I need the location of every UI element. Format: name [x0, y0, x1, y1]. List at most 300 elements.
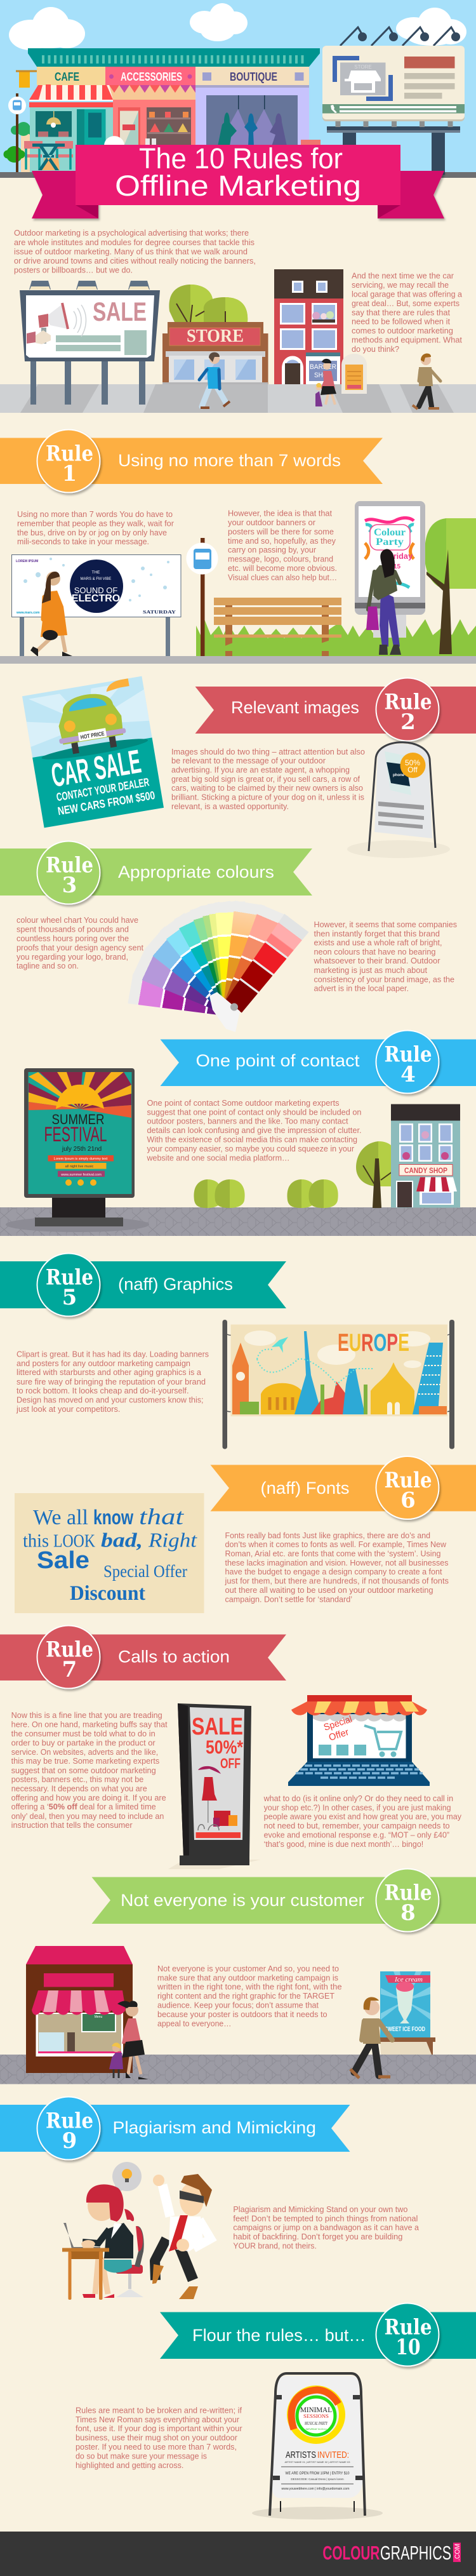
panel: rule 1 banner	[0, 429, 383, 493]
font samples box: that	[139, 1504, 184, 1529]
rule 3 text right: whatsoever to their brand. Outdoor	[313, 956, 440, 965]
rule 6 text: don’ts when it comes to fonts as well. For example, Times New	[225, 1540, 447, 1549]
intro text right: need to be followed when it	[352, 318, 450, 326]
rule 5 text: littered with starbursts and other aging graphics is a	[17, 1368, 201, 1377]
rule 7 text right: ‘that’s good, mine is due next month’… bingo!	[264, 1840, 423, 1849]
rule 4 text: With the existence of social media this can make contacting	[147, 1136, 357, 1144]
rule 7 text left: here. On one hand, marketing buffs say that	[11, 1720, 168, 1729]
rule 1 text right: However, the idea is that that	[228, 509, 332, 518]
footer	[0, 2532, 476, 2576]
ribbon	[160, 1039, 476, 1086]
figure: blindfolded man	[152, 2174, 212, 2299]
rule badge: Rule	[46, 1265, 93, 1291]
shop sign: accessories: ACCESSORIES	[121, 70, 182, 83]
panel: rule 2 banner	[195, 678, 476, 741]
title text	[115, 142, 361, 202]
rule 4 text: details can look confusing and give the impression of clutter.	[147, 1126, 362, 1135]
a-board poster rule 10: www.youwebhere.com | info@yourdomain.com	[282, 2487, 349, 2491]
rule 4 text: website and one social media platform…	[147, 1153, 289, 1162]
red house: SHOP	[314, 372, 332, 379]
rule 7 text left: only’ deal, then you may need to include an	[11, 1812, 164, 1821]
poster headline	[49, 742, 156, 817]
rule 6 text: Roman, Arial etc. are fonts that come with the ‘system’. Using	[225, 1550, 440, 1559]
figure: woman in orange	[30, 572, 72, 657]
rule 3 text left: spent thousands of pounds and	[17, 925, 129, 934]
rule badge: 5	[62, 1285, 77, 1310]
colour swatch fan	[128, 901, 308, 1032]
font samples box: bad,	[101, 1528, 143, 1551]
rule badge: 4	[400, 1062, 416, 1087]
rule badge	[376, 678, 439, 741]
rule 5 text: just look at your competitors.	[16, 1405, 121, 1414]
rule 10 text: business, use their mug shot on your outdoor	[76, 2434, 237, 2443]
sound of electro billboard: SATURDAY	[143, 610, 176, 615]
online shop laptop: Special	[322, 1714, 354, 1733]
figure: woman and child	[109, 2001, 149, 2079]
heading: Plagiarism and Mimicking	[113, 2118, 316, 2137]
rule 7 text left: offering a ‘50% off deal for a limited time	[11, 1802, 156, 1811]
car	[31, 677, 149, 763]
road	[0, 2055, 476, 2084]
rule 6 text: out there all waiting to be used on your outdoor marketing	[225, 1586, 433, 1595]
sound of electro billboard: SOUND OF	[74, 586, 117, 595]
billboard: STORE	[354, 64, 372, 70]
heading: Using no more than 7 words	[118, 451, 341, 470]
intro text right: say that there are rules that	[352, 308, 451, 317]
rule badge: Rule	[385, 1468, 432, 1493]
billboard	[322, 46, 465, 175]
poster headline: CAR SALE	[49, 743, 143, 795]
panel: rule 1 illustration	[0, 501, 476, 664]
rule 3 text right: neon colours that have no bearing	[314, 948, 435, 956]
font samples box: Discount	[70, 1582, 145, 1605]
heading: Not everyone is your customer	[121, 1891, 364, 1910]
red house: BARBER	[310, 363, 336, 371]
panel: rule 3 banner	[0, 841, 312, 904]
a-board poster rule 10: MINIMAL	[300, 2405, 332, 2414]
rule 1 text right: your outdoor banners or	[228, 518, 315, 527]
rule badge: Rule	[385, 1880, 432, 1905]
rule 9 text	[233, 2205, 419, 2251]
rule 6 text	[224, 1531, 449, 1604]
rule 10 text: do so but make sure your message is	[76, 2452, 207, 2460]
logo: colourgraphics	[322, 2542, 461, 2564]
ice cream poster: SWEET ICE FOOD	[385, 2026, 425, 2033]
intro text right	[352, 272, 462, 354]
rule 4 text	[147, 1099, 362, 1162]
title banner	[32, 142, 444, 218]
font samples box: Sale	[37, 1547, 89, 1574]
heading: Flour the rules… but…	[192, 2326, 366, 2345]
rule 3 text left: countless hours poring over the	[17, 934, 129, 943]
ribbon	[0, 1261, 286, 1308]
intro text right: great deal… But, some experts	[352, 299, 459, 308]
shop sign: cafe: CAFE	[55, 70, 79, 83]
online shop laptop: Offer	[327, 1727, 350, 1743]
intro text left: are whole institutes and modules for degree courses that tackle this	[14, 238, 255, 247]
road	[0, 1207, 476, 1236]
logo: colourgraphics: .COM	[454, 2544, 461, 2561]
rule badge	[376, 1868, 439, 1932]
rule badge: 8	[400, 1900, 416, 1926]
rule 1 text right: posters will be there for some	[228, 527, 334, 536]
rule 3 text right: exists and use a whole raft of bright,	[314, 939, 442, 948]
rule 1 text right: time and so, hopefully, as they	[228, 537, 336, 546]
rule 7 text left: order to buy or partake in the product or	[11, 1739, 155, 1748]
rule 9 text: habit of backfiring. Don’t forget you are building	[233, 2232, 402, 2241]
bus stop sign	[187, 538, 218, 657]
figure: walking man	[350, 1997, 392, 2078]
ribbon	[211, 1465, 476, 1512]
rule badge: 9	[62, 2128, 77, 2154]
bus stop sign	[8, 70, 37, 172]
rule 6 text: Fonts really bad fonts Just like graphics, there are do’s and	[225, 1531, 430, 1540]
rule 2 text: relevant, is a wasted opportunity.	[171, 802, 289, 811]
candy shop	[391, 1104, 460, 1208]
a-board poster rule 10: ARTISTS	[286, 2450, 316, 2460]
panel: rule 5 banner	[0, 1254, 286, 1316]
rule 7 text left: the consumer must be told what to do in	[11, 1729, 155, 1738]
store building: STORE	[187, 326, 244, 346]
paving	[0, 656, 476, 664]
rule 8 text: audience. Keep your focus; don’t assume that	[157, 2001, 319, 2009]
trees behind store	[169, 285, 248, 322]
rule 7 text left	[11, 1711, 168, 1830]
logo: colourgraphics: COLOUR	[322, 2542, 380, 2564]
rule 3 text right: consistency of your brand image, as the	[314, 976, 454, 984]
rule 6 text: have the budget to engage a design company to create a font	[225, 1567, 442, 1576]
rule 1 text right	[228, 509, 337, 582]
rule 3 text left: colour wheel chart You could have	[17, 916, 138, 925]
poster stand: Friday	[388, 551, 413, 561]
ribbon	[195, 687, 476, 734]
rule 7 text right: evoke and emotional response e.g. “MOT – only £40”	[264, 1830, 449, 1839]
poster bars	[48, 1155, 114, 1177]
sound of electro billboard: ELECTRO	[72, 593, 120, 604]
rule 7 text right: your shop etc.?) In other cases, if you are just making	[264, 1804, 451, 1813]
rule 3 text left: you regarding your logo, brand,	[17, 953, 128, 962]
figure: woman with child	[315, 359, 336, 406]
intro text right: local garage that was offering a	[352, 290, 462, 299]
rule 5 text: and posters for any outdoor marketing campaign	[17, 1359, 190, 1368]
rule 7 text right	[263, 1794, 462, 1849]
rule 7 text left: necessary. It depends on what you are	[11, 1785, 147, 1794]
digital sale totem: OFF	[220, 1755, 241, 1771]
rule 2 text	[171, 748, 365, 811]
poster text: www.summer festival.com	[60, 1173, 102, 1177]
rule 9 text: Plagiarism and Mimicking Stand on your own two	[233, 2205, 407, 2214]
title text: Offline Marketing	[115, 170, 361, 202]
illustration: woman at laptop and blindfolded man	[62, 2162, 212, 2300]
a-board sign rule 2: Off	[407, 765, 418, 774]
intro text right: methods and equipment. What	[352, 336, 462, 345]
rule badge	[37, 429, 100, 493]
rule badge	[37, 1626, 100, 1688]
rule badge: Rule	[46, 2109, 93, 2134]
rule 9 text: feet! Don’t be tempted to pinch things from national	[233, 2214, 418, 2223]
rule 10 text: highlighted and getting across.	[76, 2461, 183, 2470]
panel: intro street illustration	[0, 269, 476, 413]
rule 5 text: Design has moved on and your customers know this;	[17, 1396, 203, 1405]
a-board poster rule 10	[252, 2373, 383, 2519]
a-board poster rule 10: SESSIONS	[303, 2413, 329, 2419]
rule 8 text: make sure that any outdoor marketing campaign is	[157, 1974, 338, 1983]
a-board poster rule 10: ARTIST NAME 01 | ARTIST NAME 02 | ARTIST NAME 03	[284, 2460, 350, 2464]
font samples box: this	[23, 1531, 49, 1551]
car: HOT PRICE	[80, 730, 105, 741]
rule 4 text: suggest that one point of contact only should be included on	[147, 1108, 362, 1117]
rule badge	[37, 1254, 100, 1316]
rule badge: Rule	[385, 2314, 432, 2340]
rule 6 text: campaign. Don’t settle for ‘standard’	[225, 1595, 352, 1604]
poster stand: 15	[393, 563, 401, 570]
landmarks	[232, 1329, 447, 1414]
rule badge	[37, 841, 100, 904]
rule 8 text: appeal to everyone…	[157, 2020, 231, 2029]
a-board poster rule 10: DESSCODE: Casual Dress | Ipsum lorem	[291, 2478, 344, 2481]
shop: boutique	[195, 85, 309, 173]
digital sale totem: 50%*	[206, 1737, 243, 1758]
rule 2 text: great big sold sign is great or, if you sell cars, a row of	[171, 775, 360, 784]
poster headline: CONTACT YOUR DEALER	[55, 775, 150, 803]
poster text: FESTIVAL	[44, 1123, 107, 1146]
title text: The 10 Rules for	[139, 142, 343, 175]
heading: One point of contact	[195, 1051, 360, 1070]
heading: Relevant images	[231, 698, 359, 717]
rule 9 text: campaigns or jump on a bandwagon as it can have a	[233, 2223, 419, 2232]
ribbon	[0, 1635, 286, 1680]
font samples box: know	[93, 1506, 133, 1529]
font samples box: Right	[148, 1528, 197, 1551]
pavement	[0, 384, 476, 413]
rule 3 text right: marketing is just as much about	[314, 966, 428, 975]
panel: rule 4 banner	[160, 1030, 476, 1094]
rule badge	[376, 1030, 439, 1094]
rule 8 text: right content and the right graphic for the TARGET	[157, 1992, 334, 2001]
intro text left	[14, 229, 256, 274]
rule 7 text right: people aware you exist and how great you are, you may	[264, 1813, 462, 1821]
rule badge: 10	[396, 2335, 420, 2360]
ribbon	[0, 849, 312, 896]
rule 3 text left	[17, 916, 143, 970]
ribbon	[91, 1877, 476, 1924]
rule 10 text	[76, 2406, 242, 2470]
a-board poster rule 10: MUSICAL PARTY	[304, 2420, 328, 2426]
intro text right: do you think?	[352, 345, 399, 354]
digital sale totem: SALE	[192, 1714, 243, 1740]
cake shop: Menu	[95, 2015, 102, 2019]
poster text	[44, 1111, 108, 1177]
heading: Calls to action	[118, 1647, 230, 1667]
rule 3 text left: proofs that your design agency sent	[17, 944, 143, 953]
a-board sign rule 2: 50%	[405, 758, 420, 767]
rule 6 text: just for them, but there are hundreds, if not thousands of fonts	[224, 1576, 449, 1585]
panel: rule 6 banner	[211, 1456, 476, 1519]
rule 2 text: be relevant to the message of your outdoor	[171, 756, 326, 765]
figure: woman viewing poster	[366, 549, 401, 655]
figure: man in blue	[199, 352, 230, 408]
rule badge	[376, 2303, 439, 2366]
sale word: SALE	[93, 297, 147, 326]
heading: Appropriate colours	[118, 862, 274, 882]
rule 1 text left: mili-seconds to take in your message.	[17, 537, 149, 546]
panel: rule 8 banner	[91, 1868, 476, 1932]
rule 5 text: sure fire way of bringing the reputation of your brand	[17, 1378, 206, 1386]
rule 6 text: these lacks imagination and vision. However, not all businesses	[225, 1559, 448, 1567]
rule 1 text right: Visual clues can also help but…	[228, 573, 337, 582]
rule 3 text right: advert is in the local paper.	[314, 984, 409, 993]
rule 7 text right: what to do (is it online only? Or do they need to call in	[263, 1794, 453, 1803]
sound of electro billboard	[11, 555, 181, 656]
rule 2 text: advertising. If you are an estate agent, a whopping	[171, 766, 350, 775]
rule 4 text: One point of contact Some outdoor marketing experts	[147, 1099, 339, 1108]
shop: cafe	[24, 84, 113, 172]
cake shop	[26, 1946, 133, 2073]
rule badge	[37, 2097, 100, 2159]
rule badge: 2	[400, 709, 416, 735]
bench	[214, 598, 341, 656]
rule 3 text right	[313, 920, 457, 993]
car sale poster	[22, 676, 164, 828]
rule 8 text	[157, 1964, 342, 2029]
ribbon	[0, 2105, 350, 2152]
rule 1 text right: etc. will become more obvious.	[228, 564, 337, 573]
rule 8 text: Not everyone is your customer And so, you need to	[157, 1964, 339, 1973]
banner word: europe: EUROPE	[338, 1329, 409, 1357]
font samples box	[15, 1493, 204, 1613]
grass	[196, 619, 476, 656]
shop: accessories	[109, 85, 195, 172]
rule 7 text left: service. On websites, adverts and the like,	[11, 1748, 158, 1757]
a-board	[341, 354, 367, 394]
icon: megaphone	[27, 303, 86, 344]
a-board sign rule 2	[347, 742, 450, 858]
rule 7 text left: offering and how you are doing it. If you are	[11, 1794, 166, 1802]
idea bubble	[112, 2162, 142, 2194]
summer festival poster stand	[6, 1068, 149, 1232]
panel: rule 4 street illustration	[0, 1068, 476, 1236]
panel: header street scene	[0, 0, 476, 178]
rule badge: Rule	[385, 1042, 432, 1067]
rule 1 text right: message, logo, colours, brand	[228, 555, 333, 564]
poster text: SUMMER	[52, 1111, 104, 1127]
rule 1 text left	[17, 510, 174, 546]
rule 1 text right: carry on passing by, your	[228, 546, 316, 554]
rule 3 text left: tagline and so on.	[17, 962, 79, 970]
europe banner	[222, 1320, 454, 1449]
rule badge: 6	[400, 1487, 416, 1513]
sound of electro billboard: LOREM IPSUM	[16, 560, 38, 563]
figure: walking man	[413, 354, 440, 409]
intro text left: posters or billboards… but we do.	[14, 265, 133, 274]
ice cream poster: Ice cream	[394, 1976, 423, 1983]
rule badge: 3	[62, 873, 77, 898]
poster text: july 25th 21nd	[62, 1146, 102, 1153]
panel: rule 10 banner	[160, 2303, 476, 2366]
poster stand: Party	[376, 537, 404, 547]
poster sun	[56, 1085, 104, 1109]
tree	[356, 1141, 398, 1207]
rule 4 text: outdoor posters, banners and the like. Too many contact	[147, 1117, 348, 1125]
rule 10 text: font, use it. If your dog is important within your	[76, 2424, 242, 2433]
intro text left: Outdoor marketing is a psychological advertising that works; there	[14, 229, 249, 238]
rule badge: 7	[62, 1657, 77, 1682]
poster rays	[29, 1072, 131, 1109]
rule badge: Rule	[46, 852, 93, 878]
rule 2 text: Images should do two thing – attract attention but also	[171, 748, 365, 756]
rule 10 text: poster. If you need to use more than 7 words,	[76, 2443, 237, 2452]
intro text right: servicing, we may recall the	[352, 281, 449, 290]
rule 5 text: Clipart is great. But it has had its day. Loading banners	[17, 1350, 209, 1359]
candy shop: CANDY SHOP	[404, 1166, 447, 1175]
intro text left: issue of outdoor marketing. Many of us think that we walk around	[14, 248, 248, 257]
a-board poster rule 10: INVITED:	[317, 2450, 349, 2460]
rule badge: Rule	[385, 690, 432, 715]
rule 7 text left: Now this is a fine line that you are treading	[11, 1711, 162, 1720]
red house	[274, 269, 343, 384]
rule 7 text right: not need to but, remember, your campaign needs to	[264, 1821, 450, 1830]
online shop laptop	[288, 1695, 430, 1786]
shop sign: boutique: BOUTIQUE	[230, 70, 277, 83]
shop row	[24, 48, 321, 173]
sound of electro billboard: www.mars.com	[16, 611, 40, 615]
intro text left: or drive around towns and cities without really noticing the banners,	[14, 257, 256, 265]
rule badge: Rule	[46, 1637, 93, 1663]
ice cream poster	[380, 1971, 435, 2055]
panel: rule 7 banner	[0, 1626, 286, 1688]
heading: (naff) Graphics	[118, 1275, 233, 1294]
a-board poster rule 10: WE ARE OPEN FROM 10PM | ENTRY $10	[286, 2472, 350, 2476]
font samples box: LOOK	[53, 1532, 95, 1551]
rule 5 text	[16, 1350, 209, 1414]
rule 8 text: because your poster is outdoors that it needs to	[157, 2010, 327, 2019]
bushes	[194, 1179, 338, 1208]
billboard lamps	[340, 27, 460, 46]
rule badge: 1	[62, 461, 77, 486]
rule 10 text: Times New Roman says everything about your	[76, 2415, 239, 2424]
ribbon	[0, 438, 383, 484]
rule badge	[376, 1456, 439, 1519]
grass front	[196, 635, 346, 656]
rule 7 text left: this may be true. Some marketing experts	[11, 1757, 159, 1766]
trees	[4, 122, 36, 172]
rule 1 text left: remember that people as they walk, wait for	[17, 520, 174, 528]
tree	[425, 518, 476, 654]
heading: (naff) Fonts	[260, 1479, 349, 1498]
rule 1 text left: Using no more than 7 words You do have to	[17, 510, 173, 519]
rule 2 text: brilliant. Sticking a picture of your dog on it, unless it is	[171, 793, 364, 802]
intro text right: comes to outdoor marketing	[352, 326, 453, 335]
digital sale totem	[168, 1703, 261, 1869]
intro text right: And the next time we the car	[352, 272, 454, 281]
rule 7 text left: suggest that on some outdoor marketing	[11, 1766, 156, 1775]
rule 3 text right: However, it seems that some companies	[314, 920, 457, 929]
sound of electro billboard: MARS & FM VIBE	[81, 577, 111, 581]
rule 2 text: cars, waiting to be claimed by their new owners is also	[171, 784, 363, 793]
panel: rule 8 street illustration	[0, 1946, 476, 2084]
font samples box: Special Offer	[103, 1562, 187, 1581]
clouds	[9, 3, 466, 50]
a-board sign rule 2: phone	[393, 774, 405, 777]
rule 10 text: Rules are meant to be broken and re-written; if	[76, 2406, 242, 2415]
rule badge: Rule	[46, 441, 93, 466]
panel: rule 9 banner	[0, 2097, 350, 2159]
rule 8 text: written in the right tone, with the right font, with the	[157, 1983, 342, 1992]
rule 3 text right: then instantly forget that this brand	[314, 930, 440, 939]
poster headline: NEW CARS FROM $500	[57, 789, 156, 817]
poster text: all night live music	[65, 1165, 94, 1169]
rule 4 text: your company easier, so maybe you could squeeze in your	[147, 1144, 354, 1153]
